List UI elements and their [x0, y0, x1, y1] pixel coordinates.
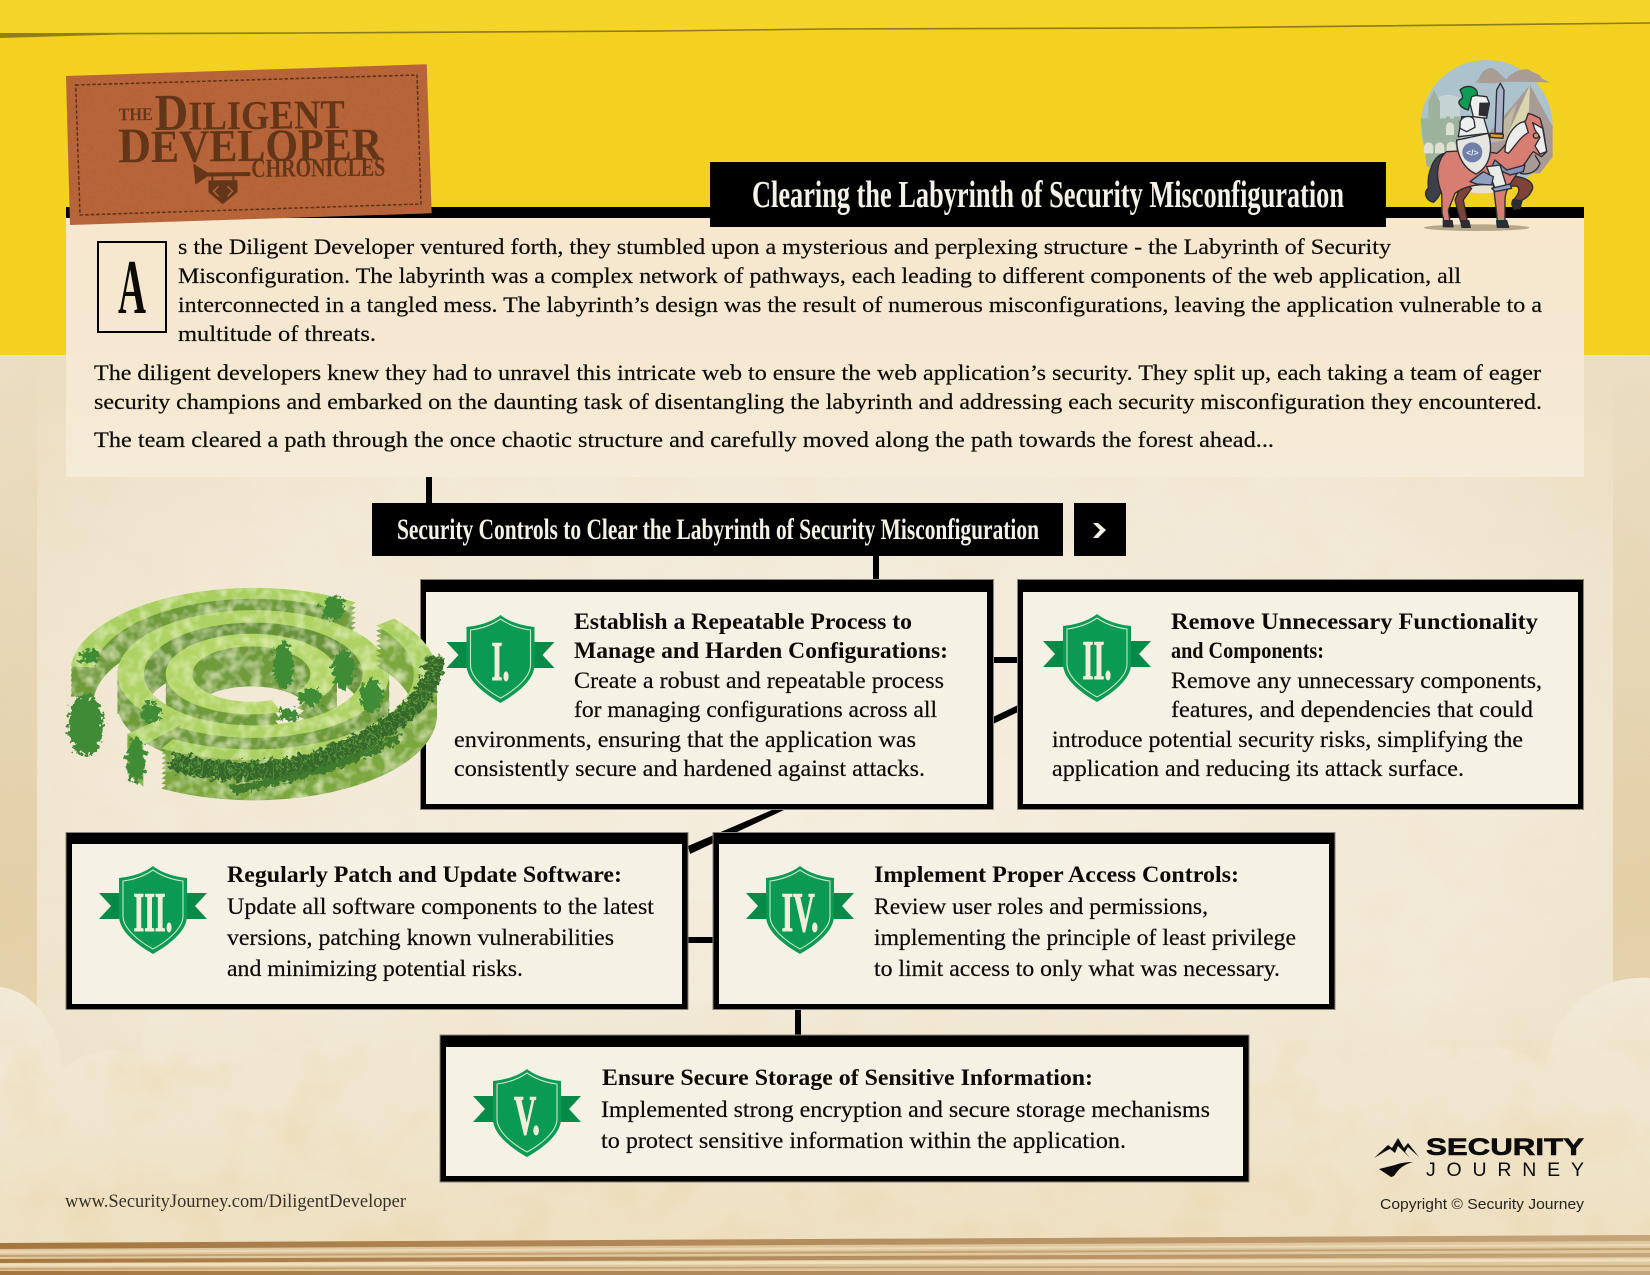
leather logo patch [66, 64, 432, 225]
card V text [601, 1065, 1210, 1153]
card III: patch and update [66, 832, 688, 1010]
section heading bar: Security Controls to Clear the Labyrinth of Security Misconfiguration [397, 513, 1039, 546]
shield code mark: </> [1466, 147, 1479, 157]
card II text: Remove any unnecessary components, [1171, 668, 1542, 693]
card III text: Update all software components to the latest [227, 894, 655, 919]
card IV text: implementing the principle of least privilege [874, 925, 1296, 950]
hedge walls [82, 593, 425, 795]
badge IV [746, 866, 854, 954]
badge I: I. [492, 631, 510, 693]
Security Journey logo: JOURNEY [1426, 1159, 1584, 1181]
card II text: Remove Unnecessary Functionality [1171, 609, 1539, 634]
section heading bar [372, 503, 1063, 556]
card IV text: Implement Proper Access Controls: [874, 862, 1239, 887]
card IV text: Review user roles and permissions, [874, 894, 1208, 919]
intro text: The diligent developers knew they had to unravel this intricate web to ensure the web application’s security. They split up, each taking a team of eager [94, 360, 1542, 385]
badge IV: IV. [782, 882, 818, 944]
knight on horse illustration [1421, 60, 1553, 231]
badge III [99, 866, 207, 954]
card III text: and minimizing potential risks. [227, 956, 523, 981]
middle ring back [131, 616, 376, 714]
intro text: security champions and embarked on the daunting task of disentangling the labyrinth and addressing each security misconfiguration they encountered. [94, 389, 1542, 414]
hedge labyrinth illustration [69, 593, 434, 795]
logo wordmark: THE [119, 104, 153, 124]
drop cap: A [118, 244, 146, 330]
card IV: access controls [713, 832, 1335, 1010]
copyright: Copyright © Security Journey [1380, 1197, 1585, 1213]
card III text [227, 862, 655, 981]
card III text: Regularly Patch and Update Software: [227, 862, 622, 887]
card IV text [874, 862, 1296, 981]
intro text: Misconfiguration. The labyrinth was a complex network of pathways, each leading to different components of the web application, all [178, 263, 1461, 288]
card V text: to protect sensitive information within the application. [601, 1128, 1126, 1153]
intro text: multitude of threats. [178, 321, 376, 346]
title banner: Clearing the Labyrinth of Security Misconfiguration [752, 174, 1344, 216]
badge II: II. [1082, 630, 1112, 692]
logo wordmark: DILIGENT [154, 83, 345, 142]
intro panel [66, 207, 1584, 477]
badge V [473, 1069, 581, 1157]
horse [1426, 113, 1547, 227]
yellow folder header [0, 0, 1650, 355]
connector lines [426, 477, 1018, 1036]
ground shadow [1424, 224, 1529, 231]
connecting wall [127, 713, 183, 787]
card IV text: to limit access to only what was necessary. [874, 956, 1280, 981]
intro text: interconnected in a tangled mess. The labyrinth’s design was the result of numerous misconfigurations, leaving the application vulnerable to a [178, 292, 1542, 317]
badge III: III. [134, 882, 172, 944]
card II text: application and reducing its attack surface. [1052, 756, 1464, 781]
card I: repeatable process [420, 580, 994, 810]
card II text: introduce potential security risks, simplifying the [1052, 727, 1523, 752]
card V text: Implemented strong encryption and secure storage mechanisms [601, 1097, 1210, 1122]
card I text: Establish a Repeatable Process to [574, 609, 912, 634]
card V text: Ensure Secure Storage of Sensitive Information: [602, 1065, 1093, 1090]
intro text: s the Diligent Developer ventured forth, they stumbled upon a mysterious and perplexing structure - the Labyrinth of Security [178, 234, 1392, 259]
logo wordmark: CHRONICLES [251, 153, 385, 183]
card III text: versions, patching known vulnerabilities [227, 925, 614, 950]
title banner [710, 162, 1386, 227]
intro text [94, 234, 1542, 452]
badge I [446, 615, 554, 703]
card I text: Create a robust and repeatable process [574, 668, 944, 693]
Security Journey logo [1374, 1134, 1584, 1181]
card V: secure storage [440, 1035, 1249, 1182]
logo wordmark [117, 83, 386, 205]
card II: remove unnecessary functionality [1018, 580, 1584, 810]
paper background [0, 340, 1650, 1275]
card I text: consistently secure and hardened against attacks. [454, 756, 925, 781]
logo mountain mark [1374, 1138, 1419, 1177]
middle ring front [131, 674, 376, 762]
card II text: and Components: [1171, 638, 1324, 663]
card II text: features, and dependencies that could [1171, 697, 1534, 722]
wooden page edge strip [0, 1235, 1650, 1275]
badge V: V. [514, 1085, 540, 1147]
paper stains [0, 355, 1650, 1245]
outer front wall [167, 622, 425, 795]
website url: www.SecurityJourney.com/DiligentDeveloper [65, 1191, 407, 1212]
background clouds [0, 978, 1650, 1245]
arrow button [1074, 503, 1126, 556]
card I text [454, 609, 948, 781]
intro text: The team cleared a path through the once chaotic structure and carefully moved along the path towards the forest ahead... [94, 427, 1274, 452]
card I text: environments, ensuring that the application was [454, 727, 916, 752]
card I text: for managing configurations across all [574, 697, 937, 722]
logo wordmark: DEVELOPER [118, 115, 383, 173]
Security Journey logo: SECURITY [1426, 1134, 1584, 1161]
scene circle [1421, 60, 1553, 193]
inner ring [179, 640, 324, 748]
outer back wall [82, 593, 349, 697]
knight rider [1457, 83, 1512, 192]
ivy clumps [69, 596, 434, 790]
card II text [1052, 609, 1542, 781]
badge II [1043, 614, 1151, 702]
card I text: Manage and Harden Configurations: [574, 638, 948, 663]
drop cap [98, 242, 166, 332]
